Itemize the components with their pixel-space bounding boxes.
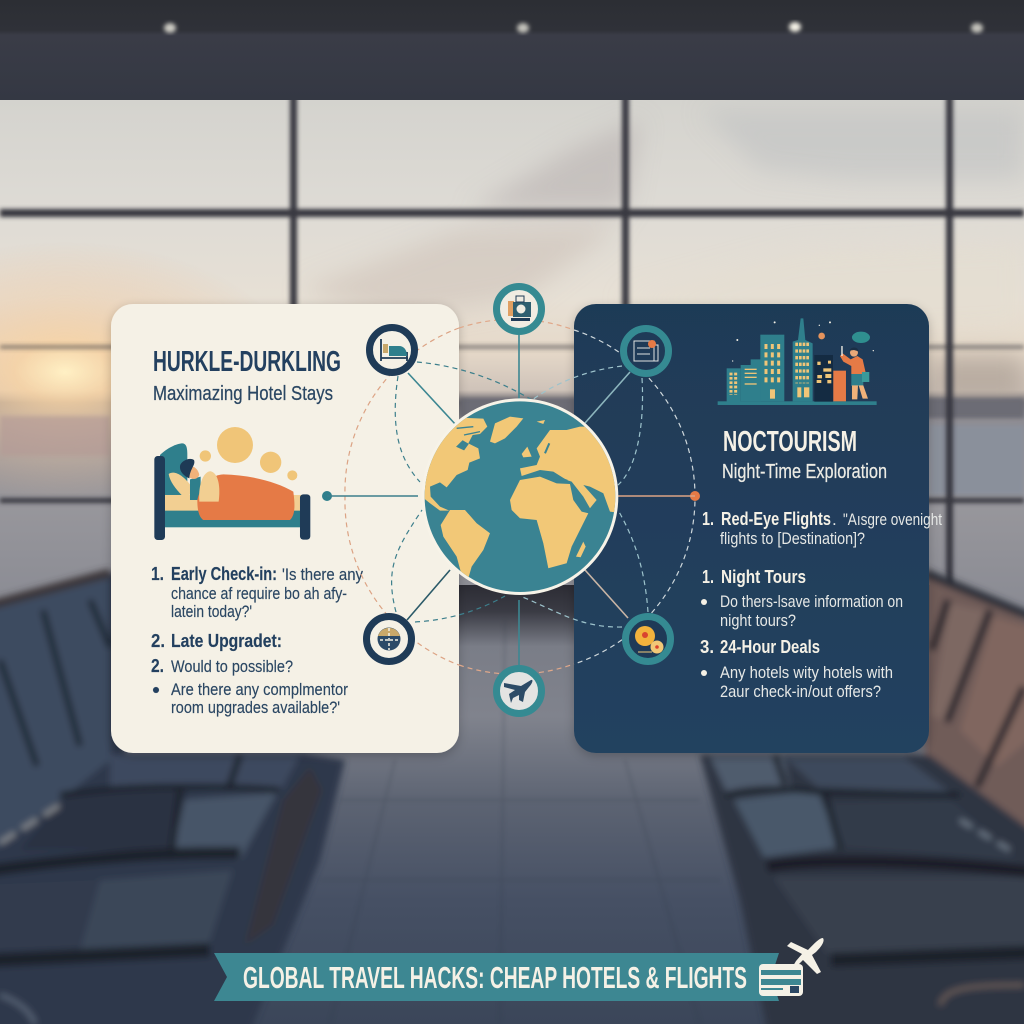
subheading: maximizing hotel stays: Maximazing Hotel Stays [153, 383, 333, 405]
list: night travel tips: Do thers-lsave information on [720, 592, 903, 611]
icon: airplane [496, 668, 542, 714]
network: solid spokes [407, 335, 630, 665]
list: hotel tips: 'Is there any [282, 565, 363, 584]
list: night travel tips: . [832, 510, 837, 529]
background: floor [105, 585, 930, 1024]
list: night travel tips: 24-Hour Deals [720, 636, 820, 657]
list: hotel tips: Late Upgradet: [171, 630, 282, 651]
list: night travel tips: 3. [700, 636, 714, 657]
background: window frame [0, 90, 1024, 600]
icon: food plates [626, 616, 670, 662]
subheading: night-time exploration: Night-Time Exploration [722, 461, 887, 483]
list: night travel tips: night tours? [720, 611, 796, 630]
list: night travel tips: Night Tours [721, 566, 806, 587]
background: ceiling [0, 0, 1024, 100]
background: left seats [0, 570, 345, 1024]
background: clouds [300, 110, 1024, 400]
network: connector right [618, 491, 700, 501]
icon: map with price pin [624, 328, 668, 374]
network: connector left [322, 491, 418, 501]
background: floor tile seams [320, 620, 720, 1024]
list: hotel tips: Early Check-in: [171, 563, 277, 584]
list: night travel tips: Red-Eye Flights [721, 508, 831, 529]
illustration: person sleeping in bed [154, 427, 310, 540]
list: night travel tips: 1. [702, 508, 714, 529]
list: hotel tips: chance af require bo ah afy- [171, 584, 347, 603]
background: setting sun glow [0, 242, 295, 502]
network: dashed connection arcs [345, 319, 695, 674]
list: hotel tips [151, 563, 363, 717]
list: night travel tips: flights to [Destination]? [720, 529, 865, 548]
icon: globe booking [366, 616, 412, 662]
globe [417, 398, 623, 595]
icon: airplane over card [787, 938, 824, 974]
list: night travel tips: 1. [702, 566, 714, 587]
list: night travel tips [700, 508, 942, 701]
list: night travel tips: "Aısgre ovenight [843, 510, 942, 529]
background: ceiling lights [164, 22, 983, 33]
icon: camera and luggage [496, 286, 542, 332]
list: hotel tips: room upgrades available?' [171, 698, 340, 717]
list: hotel tips: Would to possible? [171, 657, 293, 676]
list: hotel tips: Are there any complmentor [171, 680, 348, 699]
panel: noctourism [574, 304, 942, 753]
banner: title ribbon [214, 938, 824, 1001]
icon: credit card [759, 964, 803, 996]
list: hotel tips: 2. [151, 630, 165, 651]
list: night travel tips: Any hotels wity hotels with [720, 663, 893, 682]
list: hotel tips: 1. [151, 564, 164, 584]
illustration: night city with traveller [718, 318, 877, 405]
icon: bed [370, 328, 414, 372]
background: window sky [0, 100, 1024, 640]
background: right seats [700, 568, 1024, 1024]
list: hotel tips: latein today?' [171, 602, 252, 621]
list: night travel tips: 2aur check-in/out offers? [720, 682, 881, 701]
background: water tint [0, 398, 1024, 495]
heading: hurkle-durkling: HURKLE-DURKLING [153, 346, 341, 378]
heading: noctourism: NOCTOURISM [723, 426, 857, 458]
panel: hurkle-durkling [111, 304, 459, 753]
list: hotel tips: 2. [151, 656, 164, 676]
